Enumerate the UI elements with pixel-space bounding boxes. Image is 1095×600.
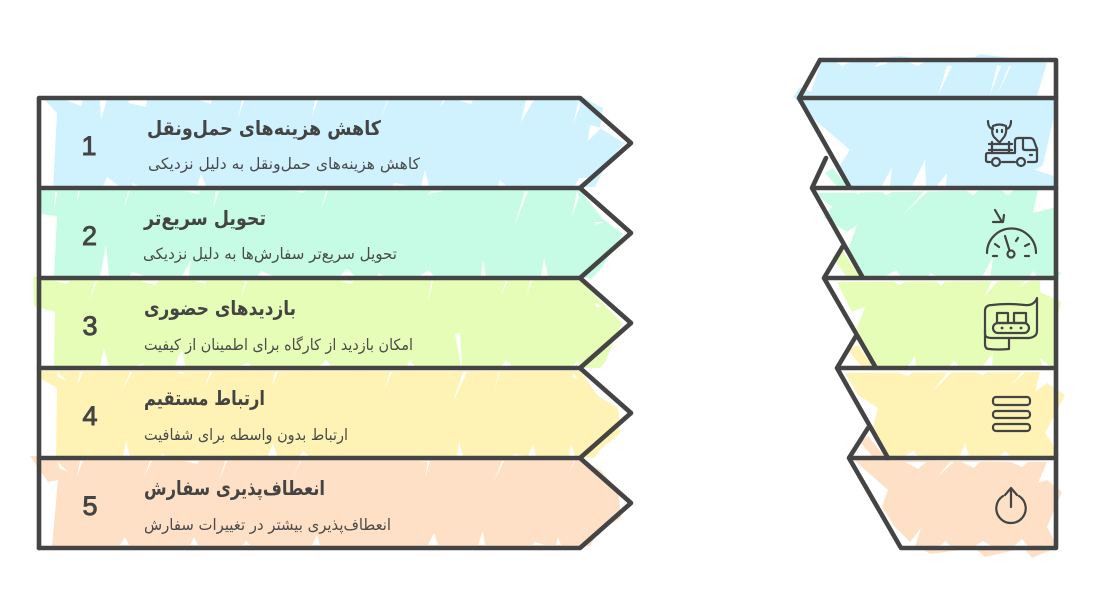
arrow 3: in-person visits <box>33 277 622 368</box>
row 5 text: انعطاف‌پذیری سفارش <box>144 476 325 501</box>
panel: right chevron stack <box>793 54 1065 558</box>
arrow 5: order flexibility <box>30 456 621 546</box>
row 2 text: 2 <box>82 221 97 251</box>
icon: stacked bars <box>993 397 1030 431</box>
chevron 3 fill <box>837 280 1061 368</box>
row 1 text: کاهش هزینه‌های حمل‌ونقل <box>147 116 381 140</box>
chevron outlines <box>799 60 1056 548</box>
row 2 text: تحویل سریع‌تر سفارش‌ها به دلیل نزدیکی <box>143 245 397 264</box>
row 5 text: 5 <box>82 491 98 521</box>
chevron 2 fill <box>815 190 1061 278</box>
row 3 text: امکان بازدید از کارگاه برای اطمینان از کیفیت <box>144 336 413 354</box>
row 4 text: ارتباط مستقیم <box>144 386 265 410</box>
chevron 4 fill <box>845 372 1065 458</box>
row 4 text: 4 <box>82 401 98 431</box>
row 1 text: 1 <box>81 131 97 161</box>
row 1 text: کاهش هزینه‌های حمل‌ونقل به دلیل نزدیکی <box>148 155 421 174</box>
arrow 2: faster delivery <box>40 190 623 279</box>
icon: speedometer <box>987 210 1036 258</box>
row 5 text: انعطاف‌پذیری بیشتر در تغییرات سفارش <box>144 516 391 535</box>
row 5 text <box>82 476 391 535</box>
icon: conveyor on scroll <box>985 298 1037 350</box>
panel: left arrow list <box>30 96 631 548</box>
row 3 text: بازدیدهای حضوری <box>144 296 296 320</box>
notch fills between chevrons <box>825 168 885 457</box>
row 2 text: تحویل سریع‌تر <box>143 206 266 230</box>
row 3 text <box>82 296 413 354</box>
icon: power button <box>996 488 1026 523</box>
arrow 4: direct communication <box>40 371 620 458</box>
arrow outlines <box>39 98 631 548</box>
row 3 text: 3 <box>82 311 98 341</box>
chevron 1 fill with top cap <box>793 54 1056 188</box>
row 4 text <box>82 386 348 445</box>
arrow 1: transport costs <box>41 96 624 189</box>
row 4 text: ارتباط بدون واسطه برای شفافیت <box>144 426 348 445</box>
row 2 text <box>82 206 397 264</box>
icon: truck with cow head <box>986 121 1037 166</box>
row 1 text <box>81 116 421 174</box>
chevron 5 fill <box>854 460 1062 558</box>
